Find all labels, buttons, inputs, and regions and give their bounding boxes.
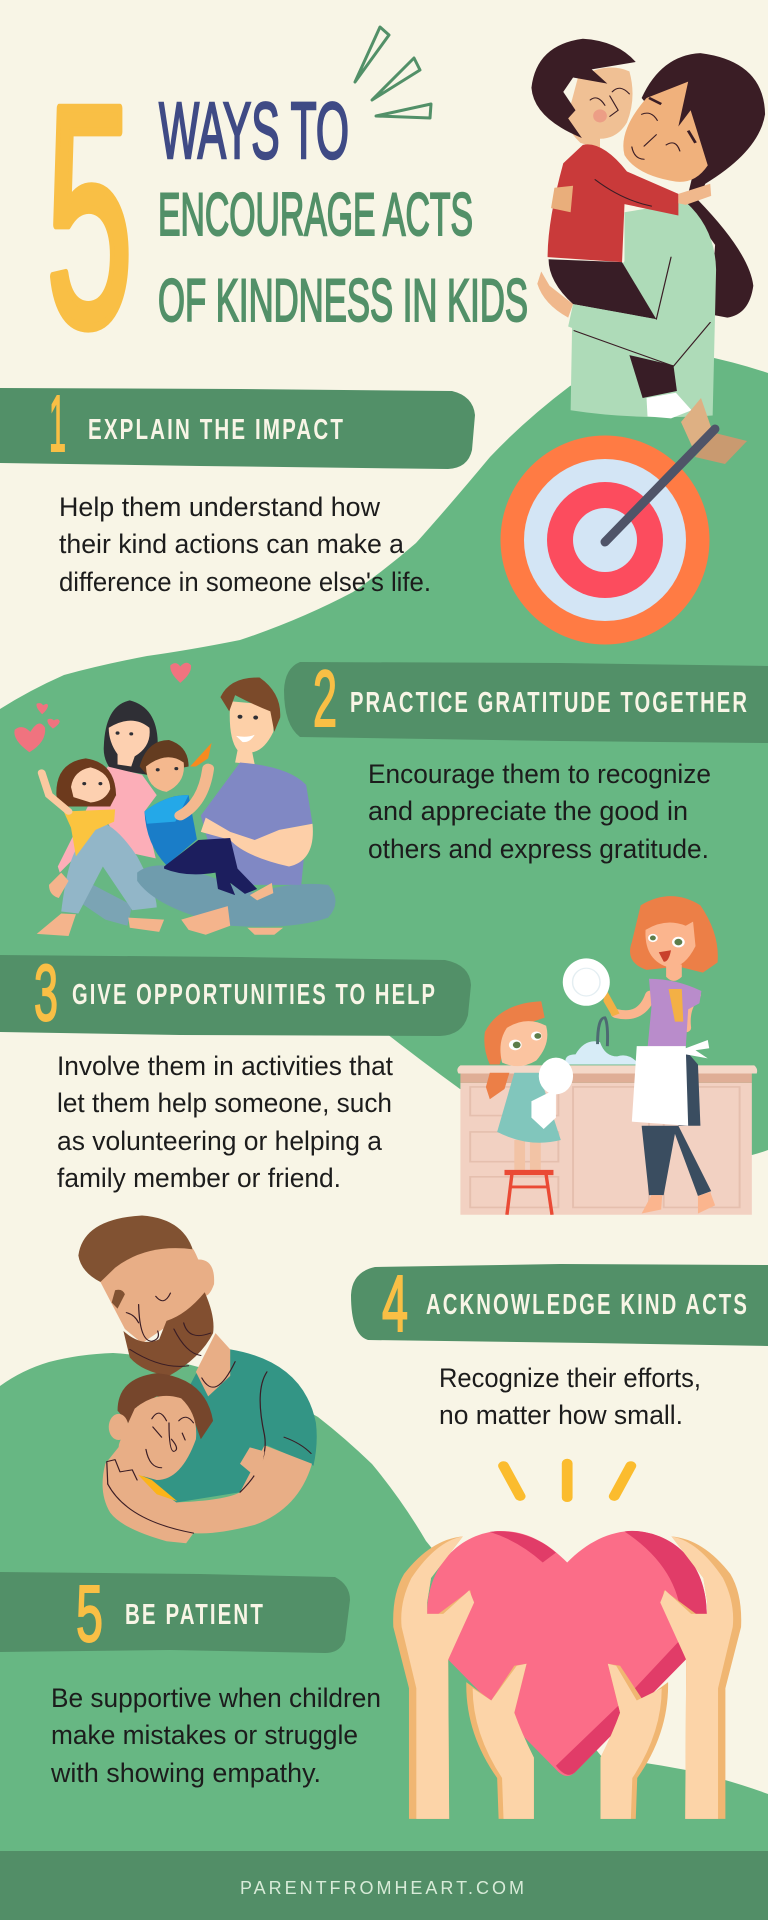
text block 4: no matter how small. [439,1400,683,1430]
banner 1 [0,388,475,469]
text block 4 [439,1363,701,1430]
illustration: family with hearts [14,663,336,936]
text block 3 [57,1051,393,1193]
icon: rays [504,1463,631,1498]
text block 3: Involve them in activities that [57,1051,393,1081]
upper hands [393,1536,473,1819]
illustration: father hugging child [78,1216,317,1543]
lower hands [466,1664,534,1819]
banner 3 number: 3 [34,948,58,1037]
text block 1: difference in someone else's life. [59,567,431,597]
banner 5 number: 5 [76,1569,103,1658]
banner 5 [0,1572,350,1653]
banner 2 number: 2 [313,654,337,743]
banner 4 [351,1264,768,1346]
text block 2: and appreciate the good in [368,796,688,826]
background: upper green wave [0,355,768,1155]
text block 2: Encourage them to recognize [368,759,711,789]
banner 4 number: 4 [382,1259,408,1348]
icon: spark triangles [355,27,431,118]
facial dots [82,715,258,785]
text block 3: as volunteering or helping a [57,1126,383,1156]
icon: hearts [14,663,191,752]
text block 3: let them help someone, such [57,1088,392,1118]
text block 5: with showing empathy. [50,1758,321,1788]
illustration: mother and daughter washing dishes [457,896,757,1215]
text: 5 [46,40,133,392]
banner 3 heading: GIVE OPPORTUNITIES TO HELP [72,979,437,1011]
icon: target with arrow [500,398,747,644]
text block 2: others and express gratitude. [368,834,709,864]
text block 1: Help them understand how [59,492,380,522]
footer text: PARENTFROMHEART.COM [240,1878,528,1898]
illustration: mother hugging child [531,39,765,418]
text block 5: make mistakes or struggle [51,1720,358,1750]
banner 1 heading: EXPLAIN THE IMPACT [88,414,345,446]
banner 5 heading: BE PATIENT [125,1599,265,1631]
text block 1 [59,492,431,597]
text block 5 [50,1683,381,1788]
footer bar [0,1851,768,1920]
illustration: hands holding heart [393,1463,741,1819]
background: lower green hill [0,1353,768,1860]
title: encourage acts: ENCOURAGE ACTS [158,181,473,248]
heart [427,1531,707,1776]
text: 1 [49,379,66,468]
text block 1: their kind actions can make a [59,529,405,559]
text block 5: Be supportive when children [51,1683,381,1713]
banner 3 [0,955,471,1036]
text block 4: Recognize their efforts, [439,1363,701,1393]
title: ways to: WAYS TO [159,86,349,175]
text block 2 [368,759,711,864]
text block 3: family member or friend. [57,1163,341,1193]
banner 2 [284,662,768,743]
